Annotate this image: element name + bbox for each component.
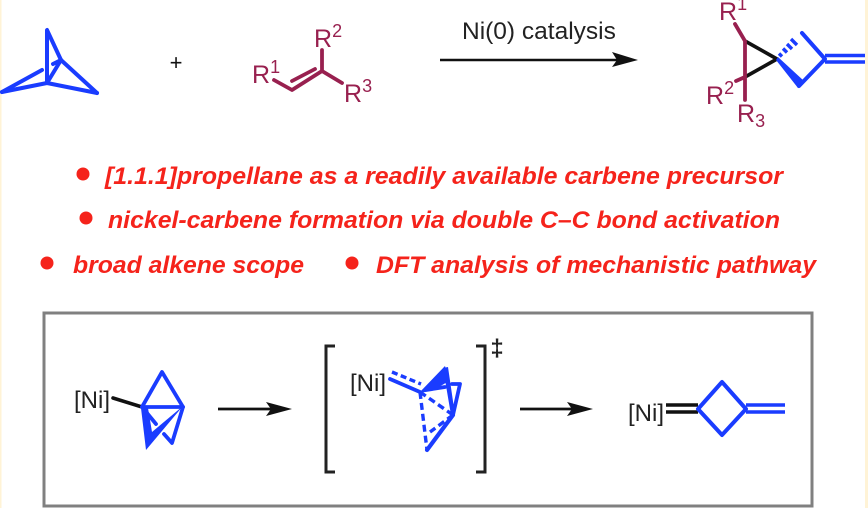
transition state xyxy=(326,335,504,472)
product: spirocycle xyxy=(706,0,865,131)
reactant: alkene: 1 xyxy=(270,57,280,77)
arrow: step 1 xyxy=(218,402,292,416)
nickel carbene: [Ni] xyxy=(628,400,664,427)
transition state: ‡ xyxy=(490,335,504,362)
plus sign: + xyxy=(170,50,182,75)
nickel carbene xyxy=(628,382,785,435)
reactant: alkene: R xyxy=(344,80,362,108)
reactant: alkene: R xyxy=(252,61,270,89)
reactant: alkene: 2 xyxy=(332,21,342,41)
bullet point 2: nickel-carbene formation via double C–C bond activation xyxy=(108,207,780,234)
reaction condition label: Ni(0) catalysis xyxy=(462,18,616,45)
product: spirocycle: 3 xyxy=(755,111,765,131)
nickel propellane complex: [Ni] xyxy=(74,387,110,414)
reactant: alkene: 3 xyxy=(362,76,372,96)
product: spirocycle: R xyxy=(706,82,724,110)
reactant: [1.1.1]propellane xyxy=(2,30,97,93)
arrow: main reaction xyxy=(440,52,638,67)
panel: mechanism box xyxy=(44,313,812,506)
reactant: alkene xyxy=(252,21,372,108)
bullet point 1: [1.1.1]propellane as a readily available carbene precursor xyxy=(104,163,784,190)
transition state: [Ni] xyxy=(350,370,386,397)
nickel propellane complex xyxy=(74,372,183,450)
product: spirocycle: R xyxy=(737,100,755,128)
bullet point 4: DFT analysis of mechanistic pathway xyxy=(376,252,817,279)
product: spirocycle: 2 xyxy=(724,78,734,98)
reactant: alkene: R xyxy=(314,25,332,53)
bullet point 3: broad alkene scope xyxy=(73,252,304,279)
highlight bullet list xyxy=(40,163,817,279)
arrow: step 2 xyxy=(520,402,593,416)
